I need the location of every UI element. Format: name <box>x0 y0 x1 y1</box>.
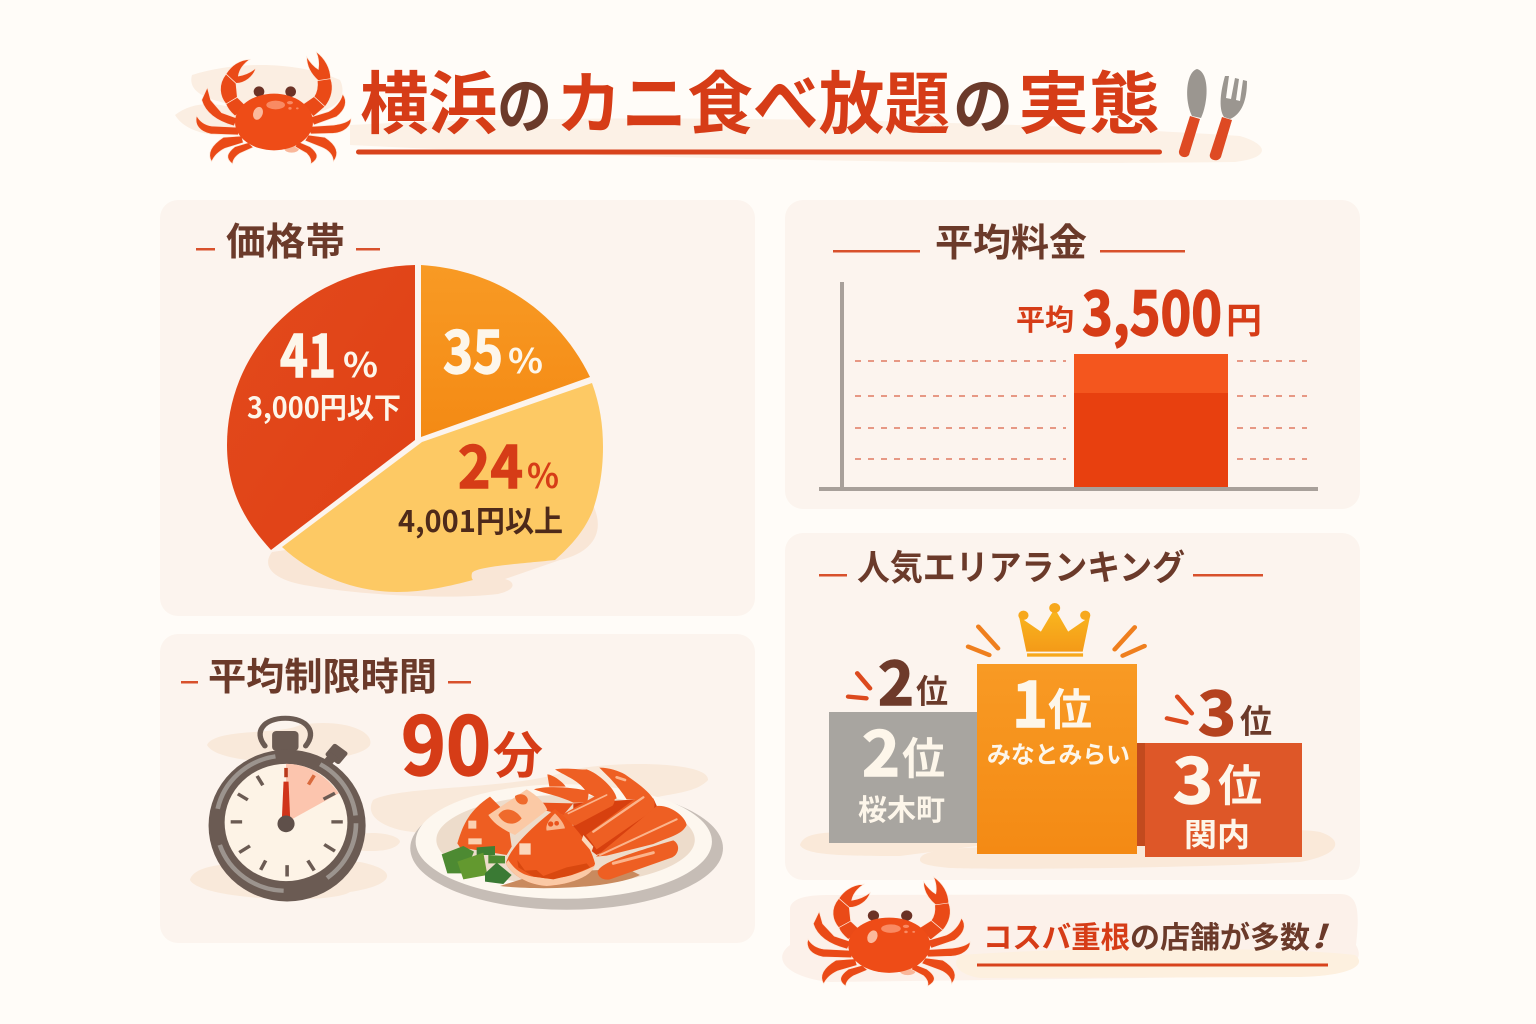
label: 35% <box>443 306 543 390</box>
heading: average time limit: 平均制限時間 <box>208 646 437 701</box>
bar chart <box>819 266 1318 489</box>
value: 90 minutes <box>401 683 543 799</box>
label: 41% <box>247 310 401 427</box>
banner: value for money <box>782 877 1359 986</box>
podium: 3rd: 位 <box>1218 750 1262 814</box>
title text: 横浜 <box>360 49 497 148</box>
label: 3rd place: 位 <box>1240 695 1272 743</box>
crab pieces <box>442 768 687 888</box>
value label: 平均 <box>1016 297 1074 339</box>
label: 24%: % <box>527 449 559 498</box>
podium: 1st: 1 <box>1012 655 1048 745</box>
icon: crab <box>807 877 970 986</box>
title underline <box>356 150 1162 154</box>
crown <box>1018 603 1090 657</box>
banner text: ! <box>1311 912 1330 958</box>
axis <box>819 282 1318 489</box>
podium: 3rd: 3 <box>1173 731 1213 821</box>
value label: 3,500 <box>1082 266 1222 353</box>
slice: 24% <box>282 383 603 592</box>
sparks <box>848 627 1192 723</box>
label: 41%: % <box>343 338 378 387</box>
slice: 41% <box>227 265 415 550</box>
bar: 3,500 yen <box>1074 354 1228 487</box>
label: 41%: 3,000円以下 <box>247 385 401 427</box>
banner text <box>983 912 1330 958</box>
title text: の <box>953 56 1013 146</box>
podium: 2nd <box>829 704 977 843</box>
label: 24% <box>398 421 563 541</box>
podium: 1st: 位 <box>1048 674 1092 738</box>
background blobs <box>190 723 708 899</box>
title text: カニ食べ放題 <box>556 49 950 148</box>
label: 3rd place: 3 <box>1198 666 1236 753</box>
banner text: の店舗が多数 <box>1130 913 1310 957</box>
podium: 3rd: 関内 <box>1184 810 1250 856</box>
icon: stopwatch <box>209 718 366 901</box>
illustration: crab plate <box>410 768 723 910</box>
slice: 35% <box>421 265 590 437</box>
podium: 2nd: 桜木町 <box>858 787 945 829</box>
panel: price range <box>160 200 755 616</box>
heading: ranking: 人気エリアランキング <box>857 540 1185 591</box>
podium: 3rd <box>1137 731 1302 857</box>
panel: popular area ranking <box>785 533 1360 880</box>
pie chart <box>227 265 603 592</box>
value label <box>1016 266 1262 353</box>
podium: 2nd: 位 <box>902 723 945 787</box>
banner text: コスバ重根 <box>983 913 1130 957</box>
heading: price range: 価格帯 <box>226 211 345 266</box>
label: 2nd place <box>878 636 948 723</box>
title text: の <box>497 56 552 146</box>
plate <box>410 784 723 910</box>
heading: average price: 平均料金 <box>935 212 1087 267</box>
label: 3rd place <box>1198 666 1272 753</box>
title text: 実態 <box>1018 49 1160 148</box>
pie shadow <box>268 505 598 597</box>
label: 35%: 35 <box>443 306 503 390</box>
panel: average time limit <box>160 634 755 943</box>
value: 90 minutes: 分 <box>493 716 543 788</box>
label: 24%: 4,001円以上 <box>398 497 563 541</box>
title text <box>360 49 1160 148</box>
title block <box>175 49 1262 164</box>
icon: knife and fork <box>1179 69 1247 160</box>
podium: 1st: みなとみらい <box>987 735 1130 770</box>
icon: crab <box>196 52 351 164</box>
value label: 円 <box>1226 292 1262 344</box>
garnish: greens <box>442 846 512 884</box>
panel: average price <box>785 200 1360 509</box>
podium: 2nd: 2 <box>862 704 900 794</box>
banner underline <box>977 964 1328 966</box>
label: 2nd place: 2 <box>878 636 914 723</box>
label: 2nd place: 位 <box>916 665 948 713</box>
label: 41%: 41 <box>280 310 336 394</box>
podium base blobs <box>800 830 1335 869</box>
label: 24%: 24 <box>458 421 523 505</box>
label: 35%: % <box>508 334 543 383</box>
value: 90 minutes: 90 <box>401 683 491 799</box>
podium: 1st <box>977 655 1137 854</box>
